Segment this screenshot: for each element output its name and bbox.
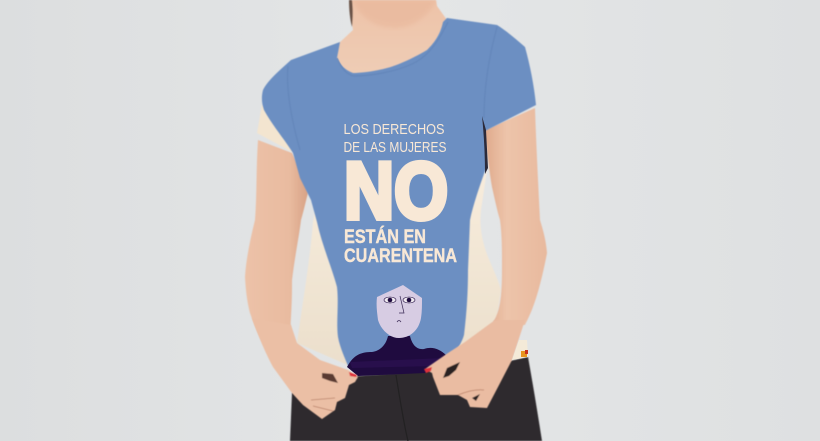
illustration: nose bbox=[399, 296, 404, 313]
right arm bbox=[485, 108, 547, 325]
hair strand bbox=[349, 0, 353, 27]
headline word: no: NO bbox=[344, 146, 448, 236]
finger gap lower bbox=[472, 394, 480, 401]
neck and chest bbox=[336, 0, 447, 76]
illustration: face bbox=[377, 285, 422, 338]
illustration: dark body bbox=[347, 336, 446, 376]
headline line: están en: ESTÁN EN bbox=[344, 226, 426, 248]
illustration: purple stripe bbox=[350, 358, 445, 368]
illustration: mouth bbox=[397, 320, 401, 322]
left hand with red nail bbox=[252, 318, 358, 419]
red nail bbox=[424, 367, 432, 373]
finger gap bbox=[443, 362, 460, 378]
trousers bbox=[290, 357, 542, 441]
blue t-shirt front and sleeves bbox=[262, 18, 536, 366]
left arm bbox=[245, 140, 308, 353]
headline bbox=[344, 122, 457, 267]
finger gap bbox=[322, 373, 338, 383]
headline line: de las mujeres: DE LAS MUJERES bbox=[344, 140, 446, 156]
red nail bbox=[349, 372, 357, 377]
right hand with red nail bbox=[424, 320, 525, 408]
waist tag bbox=[512, 340, 528, 360]
armpit shadow bbox=[482, 116, 488, 174]
cream shirt side panels bbox=[257, 105, 501, 366]
finger crease bbox=[458, 390, 484, 395]
headline line: cuarentena: CUARENTENA bbox=[344, 246, 457, 267]
illustration: woman portrait bbox=[347, 285, 446, 376]
sleeve and collar shading bbox=[288, 22, 497, 150]
illustration: right eye bbox=[403, 297, 415, 303]
headline line: los derechos: LOS DERECHOS bbox=[344, 122, 444, 138]
trousers crotch seam bbox=[396, 375, 408, 441]
finger crease bbox=[311, 398, 335, 411]
illustration: left eye bbox=[384, 297, 396, 303]
